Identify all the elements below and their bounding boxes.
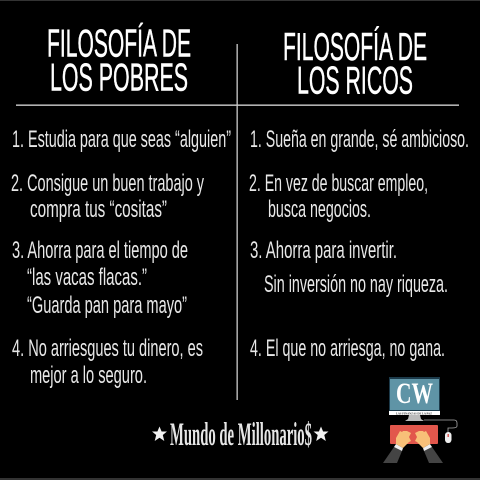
item 3 rich: 3. Ahorra para invertir. bbox=[250, 237, 397, 264]
footer: mundo de millonarios: Mundo de Millonario$ bbox=[170, 417, 312, 453]
item 4 poor bbox=[12, 335, 203, 389]
item 2 poor: 2. Consigue un buen trabajo y bbox=[11, 170, 204, 197]
footer: mundo de millonarios bbox=[152, 417, 328, 453]
heading: filosofía de los pobres: FILOSOFÍA DE bbox=[47, 22, 191, 66]
item 3 poor: “Guarda pan para mayo” bbox=[27, 292, 187, 319]
mouse bbox=[445, 432, 452, 443]
list: poor philosophy bbox=[11, 126, 231, 389]
right hand and arm bbox=[415, 431, 443, 463]
item 2 poor: compra tus “cositas” bbox=[30, 196, 167, 223]
monitor bbox=[389, 377, 440, 421]
mouse cable bbox=[424, 420, 457, 432]
item 4 poor: mejor a lo seguro. bbox=[30, 362, 147, 389]
item 2 rich bbox=[249, 170, 428, 223]
icon: left star bbox=[152, 426, 167, 441]
item 3 poor bbox=[12, 237, 188, 319]
icon: CW computer logo bbox=[383, 377, 457, 463]
item 3 poor: “las vacas flacas.” bbox=[27, 264, 147, 291]
heading: filosofía de los pobres: LOS POBRES bbox=[50, 56, 188, 100]
item 1 poor: 1. Estudia para que seas “alguien” bbox=[12, 126, 231, 153]
item 3 rich bbox=[250, 237, 448, 298]
item 2 poor bbox=[11, 170, 204, 223]
keyboard bbox=[390, 425, 438, 444]
item 2 rich: busca negocios. bbox=[268, 196, 371, 223]
list: rich philosophy bbox=[249, 126, 469, 362]
item 3 poor: 3. Ahorra para el tiempo de bbox=[12, 237, 188, 264]
left hand and arm bbox=[383, 431, 411, 463]
heading: filosofía de los ricos bbox=[283, 26, 427, 102]
icon: right star bbox=[314, 426, 328, 441]
monitor: LAS FINANZAS DE LA PAZ bbox=[396, 411, 433, 415]
item 4 poor: 4. No arriesgues tu dinero, es bbox=[12, 335, 203, 362]
heading: filosofía de los pobres bbox=[47, 22, 191, 100]
monitor: CW bbox=[396, 377, 433, 410]
